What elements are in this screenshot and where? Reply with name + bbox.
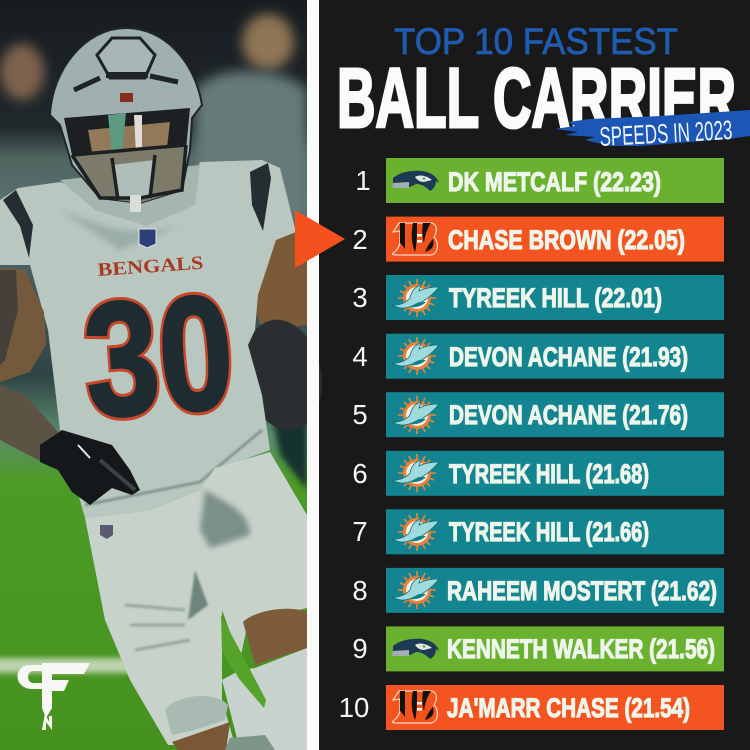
row 3 <box>352 275 724 320</box>
pants <box>85 452 307 745</box>
row 7 <box>352 509 724 554</box>
knee <box>243 609 307 665</box>
left arm with tattoos <box>0 268 46 382</box>
wordmark: BENGALS <box>97 253 204 281</box>
row 6: 6 <box>352 458 368 489</box>
row 10 <box>339 685 724 730</box>
panel: player photo <box>0 0 332 750</box>
row 1: DK METCALF (22.23) <box>448 167 661 197</box>
glove <box>40 430 140 505</box>
row 9 <box>352 626 724 671</box>
row 1 <box>355 158 724 203</box>
row 3: 3 <box>352 282 368 313</box>
row 3: TYREEK HILL (22.01) <box>449 283 662 313</box>
row 6 <box>352 451 724 496</box>
row 9: 9 <box>352 633 368 664</box>
row 1: 1 <box>355 165 371 196</box>
row 8: 8 <box>352 575 368 606</box>
row 4: 4 <box>352 341 368 372</box>
row 2: 2 <box>352 224 368 255</box>
arrow: highlight marker <box>295 210 345 268</box>
football <box>234 312 332 438</box>
heading: top 10 fastest: TOP 10 FASTEST <box>394 20 678 62</box>
row 2 <box>352 217 724 262</box>
helmet <box>50 28 202 203</box>
row 4 <box>352 334 724 379</box>
jersey <box>0 160 296 518</box>
number 30: 30 <box>79 261 239 452</box>
visor and face <box>64 108 190 155</box>
row 8 <box>352 568 724 613</box>
row 5: 5 <box>352 399 368 430</box>
right arm <box>252 232 307 330</box>
row 2: CHASE BROWN (22.05) <box>448 225 685 255</box>
collar <box>60 165 200 226</box>
row 10: 10 <box>339 692 369 723</box>
divider: white strip <box>307 0 319 750</box>
row 5 <box>352 392 724 437</box>
row 7: TYREEK HILL (21.66) <box>449 517 649 547</box>
row 6: TYREEK HILL (21.68) <box>449 459 649 489</box>
icon: PFN logo <box>17 663 90 730</box>
nfl shield <box>139 229 156 248</box>
row 7: 7 <box>352 516 368 547</box>
lower leg <box>222 648 307 750</box>
number 30: 30 <box>79 261 239 452</box>
